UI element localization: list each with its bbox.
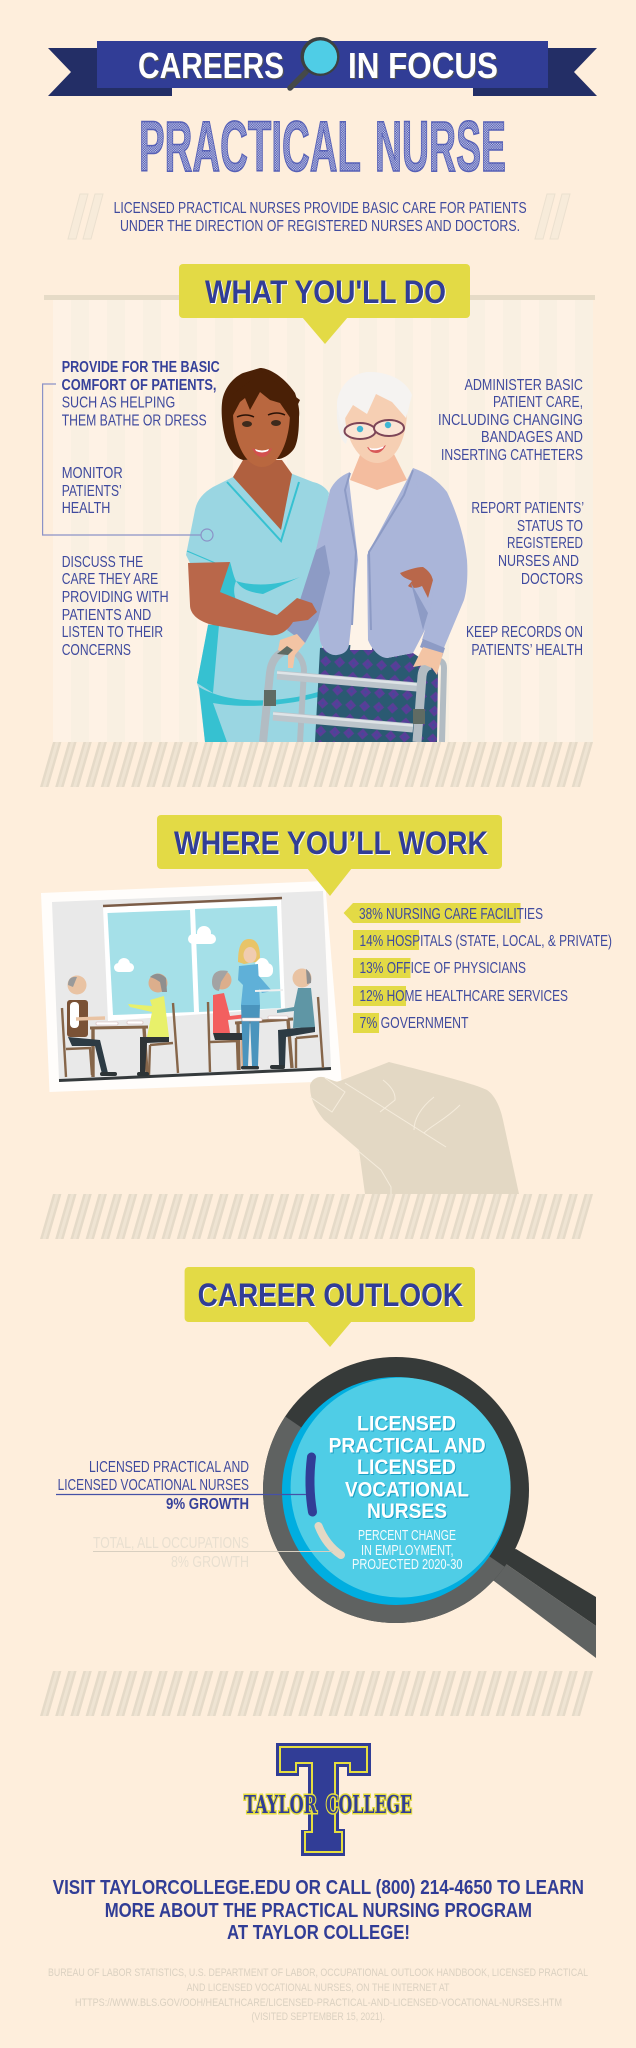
- lens heading: LICENSED: [357, 1412, 456, 1436]
- right duties text: REGISTERED: [507, 535, 583, 552]
- label: practical nurses growth: [56, 1459, 306, 1513]
- patient hands: [278, 634, 305, 668]
- label: practical nurses growth: 9% GROWTH: [166, 1496, 249, 1513]
- label: practical nurses growth: LICENSED VOCATIONAL NURSES: [58, 1477, 249, 1494]
- heading: career outlook: [185, 1267, 475, 1347]
- heading: what you'll do: WHAT YOU'LL DO: [205, 274, 446, 310]
- left duties text: DISCUSS THE: [62, 554, 143, 571]
- label: all occupations growth: TOTAL, ALL OCCUPATIONS: [93, 1535, 249, 1552]
- right duties text: INCLUDING CHANGING: [438, 412, 583, 429]
- left duties text: THEM BATHE OR DRESS: [62, 413, 207, 430]
- lens subtext: [352, 1528, 462, 1573]
- chart: workplace percentage bars: 38% NURSING CARE FACILITIES: [359, 906, 543, 923]
- panel: what you'll do: [43, 295, 595, 742]
- source citation: [48, 1967, 588, 2023]
- chart: workplace percentage bars: 12% HOME HEALTHCARE SERVICES: [360, 988, 568, 1005]
- nurse scrubs: [186, 473, 329, 742]
- nurse hand behind patient: [400, 567, 433, 598]
- walker rear legs: [290, 650, 444, 742]
- banner: careers in focus: CAREERS: [138, 45, 284, 86]
- panel: career outlook magnifier: [56, 1357, 596, 1658]
- heading: where you'll work: [157, 815, 502, 896]
- lens subtext: PERCENT CHANGE: [358, 1528, 456, 1544]
- walker grips and clamps: [264, 646, 425, 724]
- lens heading: NURSES: [367, 1499, 447, 1523]
- place settings: [96, 1016, 288, 1025]
- lens subtext: PROJECTED 2020-30: [352, 1557, 462, 1573]
- intro text block with slashes: UNDER THE DIRECTION OF REGISTERED NURSES AND DOCTORS.: [120, 218, 520, 235]
- growth arc: practical nurses: [310, 1457, 312, 1512]
- icon: hand holding photo: [310, 1062, 519, 1194]
- divider band 3: [47, 1671, 587, 1716]
- seated woman in red: [212, 970, 247, 1068]
- call to action: AT TAYLOR COLLEGE!: [227, 1921, 410, 1944]
- right duties text: BANDAGES AND: [481, 429, 583, 446]
- chart: workplace percentage bars: 7% GOVERNMENT: [360, 1015, 469, 1032]
- left duties text: LISTEN TO THEIR: [62, 624, 163, 641]
- divider band 2: [47, 1194, 587, 1239]
- photo of care facility: [41, 881, 342, 1092]
- seated man in teal: [270, 968, 315, 1069]
- window: [103, 898, 285, 1021]
- left duties text: [62, 359, 220, 659]
- title: practical nurse: NURSE: [375, 108, 506, 187]
- lens heading: LICENSED: [357, 1455, 456, 1479]
- logo: taylor college: TAYLOR: [244, 1790, 318, 1819]
- banner: careers in focus: [48, 37, 597, 96]
- lens subtext: IN EMPLOYMENT,: [361, 1543, 454, 1559]
- intro text block with slashes: [68, 194, 570, 239]
- label: practical nurses growth: LICENSED PRACTICAL AND: [89, 1459, 249, 1476]
- left duties text: CARE THEY ARE: [62, 571, 158, 588]
- source citation: AND LICENSED VOCATIONAL NURSES, ON THE INTERNET AT: [187, 1982, 450, 1994]
- nurse forearm: [188, 562, 317, 635]
- left duties text: MONITOR: [62, 465, 123, 482]
- magnifier handle: [470, 1549, 596, 1658]
- patient skirt: [315, 645, 438, 742]
- logo: taylor college: COLLEGE: [326, 1790, 412, 1819]
- banner: careers in focus: IN FOCUS: [348, 45, 498, 86]
- left duties text: PATIENTS AND: [62, 607, 151, 624]
- table and chairs right: [208, 997, 323, 1072]
- left duties text: CONCERNS: [62, 642, 131, 659]
- left duties text: PROVIDE FOR THE BASIC: [62, 359, 220, 376]
- right duties text: DOCTORS: [521, 571, 583, 588]
- seated woman in yellow: [128, 974, 169, 1076]
- chart: workplace percentage bars: 13% OFFICE OF PHYSICIANS: [360, 960, 526, 977]
- title: practical nurse: PRACTICAL: [139, 108, 361, 187]
- nurse head and neck: [222, 368, 300, 541]
- patient cardigan body: [316, 472, 358, 655]
- left duties text: PROVIDING WITH: [62, 589, 169, 606]
- floor: [59, 1068, 331, 1080]
- label: all occupations growth: 8% GROWTH: [171, 1554, 249, 1571]
- left duties text: SUCH AS HELPING: [62, 395, 175, 412]
- right duties text: PATIENTS’ HEALTH: [471, 642, 583, 659]
- magnifier lens: [282, 1377, 511, 1605]
- lens heading: PRACTICAL AND: [329, 1434, 486, 1458]
- patient head: [337, 372, 412, 490]
- lens heading: [329, 1412, 486, 1523]
- right duties text: NURSES AND: [498, 553, 579, 570]
- right duties text: KEEP RECORDS ON: [466, 624, 583, 641]
- patient shirt: [348, 478, 407, 650]
- panel: where you'll work: [41, 881, 612, 1194]
- right duties text: [438, 377, 584, 659]
- patient right arm: [413, 468, 467, 650]
- chart: workplace percentage bars: [344, 903, 612, 1033]
- right duties text: ADMINISTER BASIC: [464, 377, 583, 394]
- left duties text: COMFORT OF PATIENTS,: [62, 377, 216, 394]
- left duties text: HEALTH: [62, 500, 110, 517]
- call to action: [53, 1876, 584, 1944]
- source citation: (VISITED SEPTEMBER 15, 2021).: [252, 2011, 385, 2023]
- right duties text: REPORT PATIENTS’: [471, 500, 584, 517]
- heading: what you'll do: [179, 264, 470, 344]
- icon: magnifying glass: [290, 37, 340, 88]
- divider band 1: [47, 742, 587, 787]
- right duties text: PATIENT CARE,: [493, 394, 583, 411]
- walker frame: [263, 650, 431, 742]
- label: all occupations growth: [93, 1535, 333, 1571]
- growth arc: all occupations: [318, 1526, 341, 1555]
- seated man: [67, 976, 117, 1076]
- illustration: nurse and patient: [186, 368, 467, 742]
- callout connector: [43, 384, 213, 541]
- table and chairs left: [62, 1003, 178, 1077]
- magnifier rim: [263, 1357, 529, 1623]
- lens heading: VOCATIONAL: [345, 1478, 469, 1502]
- logo: taylor college: [244, 1743, 412, 1856]
- right duties text: INSERTING CATHETERS: [441, 447, 583, 464]
- right duties text: STATUS TO: [517, 518, 583, 535]
- left duties text: PATIENTS’: [62, 483, 122, 500]
- heading: where you'll work: WHERE YOU’LL WORK: [174, 825, 488, 861]
- heading: career outlook: CAREER OUTLOOK: [198, 1277, 463, 1313]
- call to action: MORE ABOUT THE PRACTICAL NURSING PROGRAM: [105, 1899, 532, 1922]
- standing nurse: [238, 939, 283, 1069]
